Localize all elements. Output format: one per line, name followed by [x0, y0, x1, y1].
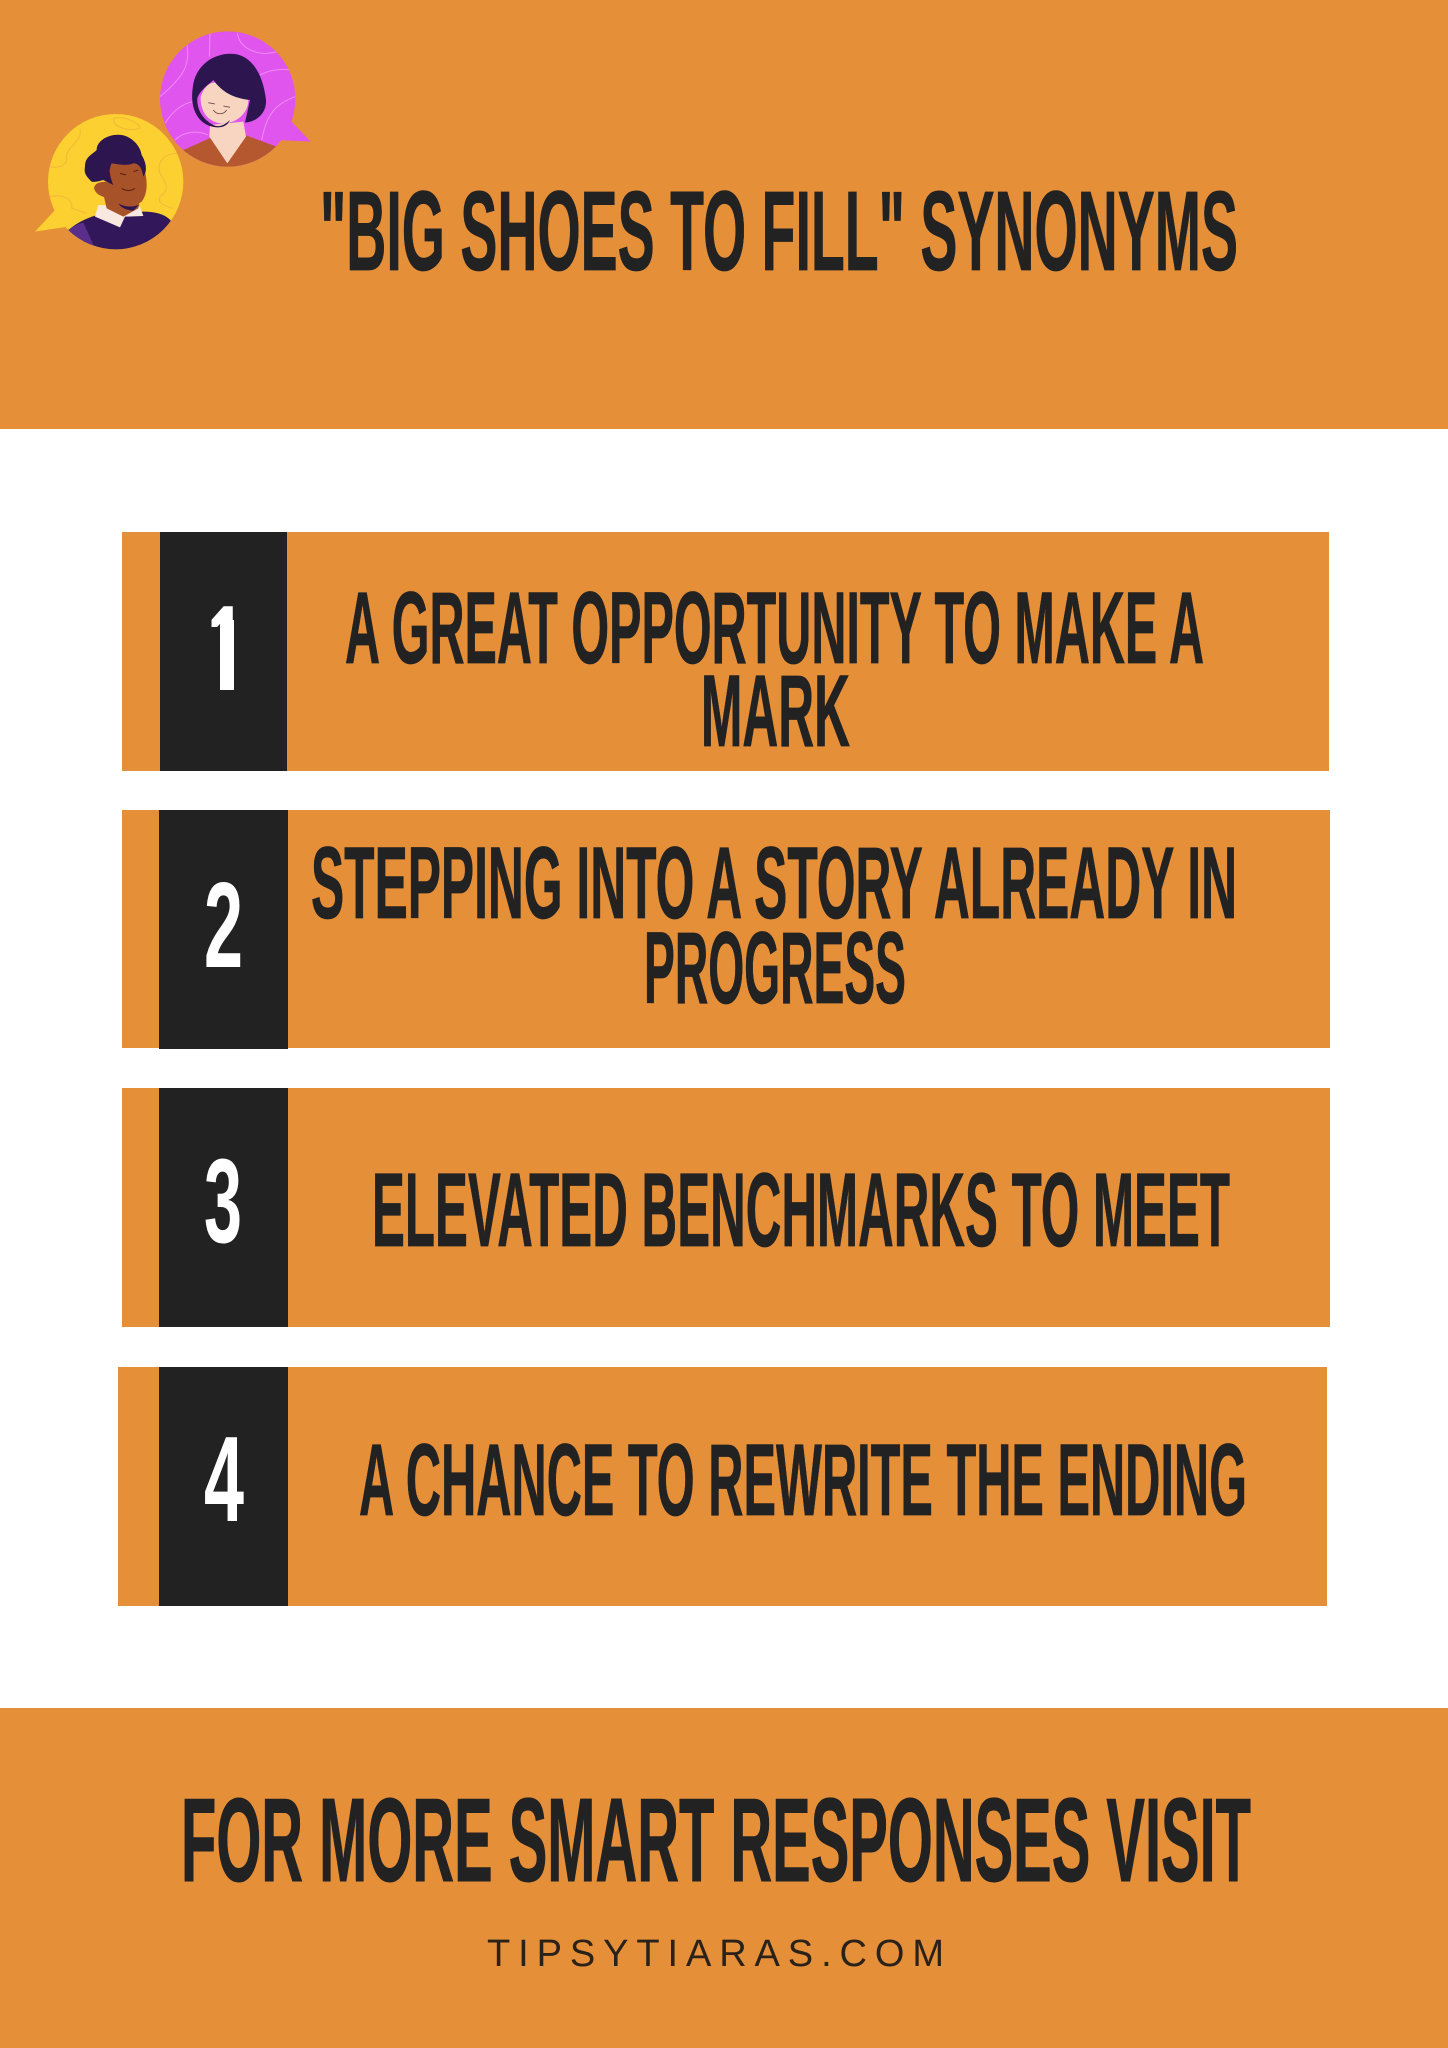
panel: item 3	[122, 1088, 1330, 1327]
panel: item 2	[122, 810, 1330, 1049]
number block 1	[160, 532, 287, 771]
number block 2	[159, 810, 288, 1049]
icon: man in yellow speech bubble	[35, 114, 183, 253]
icon: woman in pink speech bubble	[160, 31, 311, 173]
number block 4	[159, 1367, 288, 1606]
footer band	[0, 1708, 1448, 2048]
icon: two speech bubbles with people	[35, 31, 311, 253]
panel: item 2: PROGRESS	[644, 911, 906, 1025]
panel: item 1: MARK	[701, 654, 850, 768]
number 1: 1	[207, 580, 246, 716]
panel: item 1	[122, 532, 1329, 771]
header band	[0, 0, 1448, 429]
number 4: 4	[204, 1411, 244, 1547]
number 3: 3	[204, 1134, 242, 1268]
footer website: TIPSYTIARAS.COM	[487, 1933, 944, 1975]
number 2: 2	[204, 857, 243, 993]
number block 3	[159, 1088, 288, 1327]
panel: item 4	[118, 1367, 1327, 1606]
